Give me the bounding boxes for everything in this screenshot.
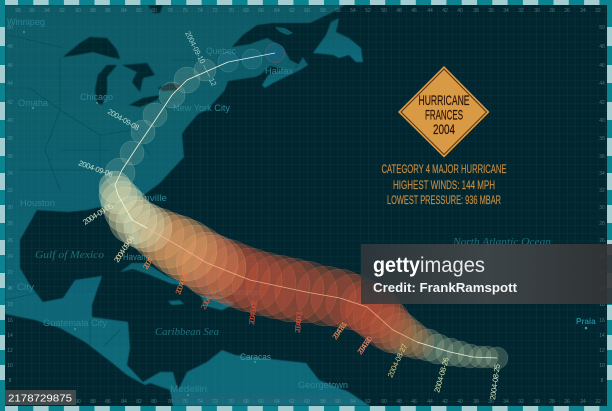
date labels along the track: 2004-09-02 [247, 300, 259, 325]
longitude labels: bottom: 24 [580, 399, 586, 405]
latitude labels: left: 38 [7, 136, 13, 142]
longitude labels: top [15, 8, 601, 14]
longitude labels: top: 90 [75, 8, 81, 14]
longitude labels: top: 80 [151, 8, 157, 14]
longitude labels: top: 44 [427, 8, 433, 14]
date labels along the track: 2004 [141, 256, 155, 271]
date labels along the track: 2004-09-01 [293, 310, 304, 333]
latitude labels: left: 26 [7, 238, 13, 244]
watermark banner: getty [373, 254, 420, 277]
longitude labels: bottom: 38 [473, 399, 479, 405]
city and sea labels: City [17, 282, 35, 292]
longitude labels: bottom: 32 [518, 399, 524, 405]
island: Hispaniola [200, 295, 235, 310]
latitude labels: left: 40 [7, 118, 13, 124]
latitude labels: left: 12 [7, 348, 13, 354]
latitude labels: left: 28 [7, 221, 13, 227]
date labels along the track: 2004-08-27 [386, 342, 409, 379]
longitude labels: bottom: 44 [427, 399, 433, 405]
longitude labels: top: 58 [320, 8, 326, 14]
longitude labels: bottom: 36 [488, 399, 494, 405]
latitude labels: left: 30 [7, 205, 13, 211]
longitude labels: top: 46 [411, 8, 417, 14]
island: Jamaica [168, 300, 184, 305]
latitude labels: right: 8 [601, 378, 604, 384]
border: right checker strip [607, 0, 612, 411]
longitude labels: top: 78 [167, 8, 173, 14]
latitude labels: right: 38 [599, 136, 605, 142]
longitude labels: bottom: 30 [534, 399, 540, 405]
latitude labels: left: 16 [7, 318, 13, 324]
city and sea labels: Omaha [18, 98, 48, 108]
longitude labels: top: 86 [105, 8, 111, 14]
longitude labels: bottom [75, 399, 601, 405]
latitude labels: left: 32 [7, 188, 13, 194]
border: bottom checker strip [0, 406, 612, 411]
latitude labels: right: 12 [599, 348, 605, 354]
latitude labels: right: 10 [599, 363, 605, 369]
peninsula: Nova Scotia [262, 57, 308, 88]
latitude labels: right: 50 [599, 25, 605, 31]
longitude labels: bottom: 40 [457, 399, 463, 405]
city and sea labels: Quebec [206, 46, 236, 56]
latitude labels: left: 36 [7, 154, 13, 160]
longitude labels: top: 40 [457, 8, 463, 14]
longitude labels: top: 96 [29, 8, 35, 14]
latitude labels: left: 48 [7, 44, 13, 50]
city and sea labels: Houston [20, 198, 55, 208]
city and sea labels: New York City [173, 103, 230, 113]
longitude labels: top: 38 [473, 8, 479, 14]
date labels along the track [77, 30, 502, 400]
warning sign: 2004 [433, 121, 455, 137]
latitude labels: left: 34 [7, 171, 13, 177]
longitude labels: top: 72 [212, 8, 218, 14]
longitude labels: bottom: 78 [167, 399, 173, 405]
state borders [5, 34, 195, 345]
city and sea labels: Guatemala City [43, 318, 108, 328]
city and sea labels: North Atlantic Ocean [452, 236, 552, 248]
city and sea labels: Praia [576, 317, 596, 326]
longitude labels: bottom: 60 [304, 399, 310, 405]
latitude labels: left: 42 [7, 100, 13, 106]
longitude labels: top: 34 [503, 8, 509, 14]
latitude labels: left: 8 [9, 378, 12, 384]
date labels along the track: 2004-08-26 [432, 356, 451, 394]
longitude labels: bottom: 88 [90, 399, 96, 405]
map: land masses [5, 5, 370, 406]
longitude labels: bottom: 90 [75, 399, 81, 405]
date labels along the track: 2004-08-30 [355, 335, 374, 356]
island: Anticosti [275, 27, 293, 35]
longitude labels: bottom: 42 [442, 399, 448, 405]
longitude labels: bottom: 72 [212, 399, 218, 405]
longitude labels: top: 92 [59, 8, 65, 14]
latitude labels: right: 30 [599, 205, 605, 211]
longitude labels: top: 42 [442, 8, 448, 14]
longitude labels: bottom: 74 [197, 399, 203, 405]
Great Lakes [63, 5, 183, 107]
longitude labels: top: 62 [289, 8, 295, 14]
city and sea labels: Medellin [170, 384, 207, 394]
latitude labels: left: 50 [7, 25, 13, 31]
date labels along the track: 2004-09-08 [106, 107, 141, 132]
longitude labels: bottom: 64 [274, 399, 280, 405]
latitude labels: left: 22 [7, 270, 13, 276]
latitude labels: right: 20 [599, 286, 605, 292]
date labels along the track: 2004-08-31 [330, 320, 349, 341]
latitude labels: right: 46 [599, 63, 605, 69]
longitude labels: top: 64 [274, 8, 280, 14]
warning sign [398, 66, 490, 158]
image id tag: 2178729875 [8, 392, 72, 404]
longitude labels: bottom: 80 [151, 399, 157, 405]
city and sea labels: Caribbean Sea [155, 326, 219, 338]
longitude labels: top: 60 [304, 8, 310, 14]
city and sea labels: Jacksonville [113, 193, 167, 203]
longitude labels: top: 36 [488, 8, 494, 14]
longitude labels: top: 84 [121, 8, 127, 14]
latitude labels: left: 46 [7, 63, 13, 69]
longitude labels: top: 32 [518, 8, 524, 14]
date labels along the track: 2004-09-06 [77, 158, 114, 179]
longitude labels: bottom: 28 [549, 399, 555, 405]
watermark banner: images [420, 254, 485, 277]
city and sea labels: Halifax [265, 66, 294, 76]
latitude labels: right: 16 [599, 318, 605, 324]
city and sea labels: Santo Domingo [205, 288, 261, 297]
latitude labels: right: 26 [599, 238, 605, 244]
longitude labels: top: 26 [564, 8, 570, 14]
longitude labels: top: 88 [90, 8, 96, 14]
date labels along the track: 2004-09-04 [112, 234, 136, 264]
border: top checker strip [0, 0, 612, 5]
latitude labels: left: 14 [7, 333, 13, 339]
longitude labels: top: 70 [228, 8, 234, 14]
date labels along the track: 2004-09-05 [81, 201, 115, 227]
city and sea labels: Chicago [80, 92, 113, 102]
latitude labels: right: 32 [599, 188, 605, 194]
watermark banner: Credit: FrankRamspott [373, 281, 518, 295]
latitude labels: right: 14 [599, 333, 605, 339]
longitude labels: bottom: 68 [243, 399, 249, 405]
latitude labels: right: 28 [599, 221, 605, 227]
latitude labels: right: 24 [599, 254, 605, 260]
longitude labels: bottom: 50 [381, 399, 387, 405]
island: Newfoundland [313, 18, 363, 62]
longitude labels: bottom: 54 [350, 399, 356, 405]
longitude labels: bottom: 56 [335, 399, 341, 405]
longitude labels: top: 28 [549, 8, 555, 14]
border: left checker strip [0, 0, 5, 411]
longitude labels: top: 56 [335, 8, 341, 14]
longitude labels: top: 66 [258, 8, 264, 14]
longitude labels: top: 54 [350, 8, 356, 14]
latitude labels: right: 42 [599, 100, 605, 106]
longitude labels: bottom: 70 [228, 399, 234, 405]
longitude labels: bottom: 66 [258, 399, 264, 405]
longitude labels: top: 68 [243, 8, 249, 14]
longitude labels: bottom: 52 [365, 399, 371, 405]
storm statistics text: CATEGORY 4 MAJOR HURRICANE [382, 162, 506, 176]
island: Cuba [120, 263, 187, 285]
longitude labels: bottom: 22 [595, 399, 601, 405]
longitude labels: top: 24 [580, 8, 586, 14]
longitude labels: top: 22 [595, 8, 601, 14]
latitude labels: left: 20 [7, 286, 13, 292]
latitude labels: left: 44 [7, 81, 13, 87]
hurricane track line [115, 53, 497, 358]
longitude labels: top: 98 [15, 8, 21, 14]
latitude labels: left: 18 [7, 302, 13, 308]
longitude labels: bottom: 58 [320, 399, 326, 405]
longitude labels: bottom: 34 [503, 399, 509, 405]
storm statistics text: LOWEST PRESSURE: 936 MBAR [387, 193, 501, 207]
longitude labels: bottom: 26 [564, 399, 570, 405]
watermark banner [361, 244, 612, 304]
longitude labels: top: 52 [365, 8, 371, 14]
longitude labels: top: 94 [44, 8, 50, 14]
city and sea labels: Winnipeg [7, 17, 45, 27]
date labels along the track: 2004-08-25 [488, 363, 502, 400]
city and sea labels: Georgetown [298, 380, 348, 390]
longitude labels: top: 30 [534, 8, 540, 14]
latitude labels: left: 24 [7, 254, 13, 260]
date labels along the track: 2004 [199, 294, 213, 311]
hurricane swath: wind-field circles [99, 44, 508, 369]
latitude labels: right: 18 [599, 302, 605, 308]
longitude labels: bottom: 48 [396, 399, 402, 405]
longitude labels: top: 74 [197, 8, 203, 14]
latitude labels: left [7, 25, 13, 384]
latitude labels: right: 48 [599, 44, 605, 50]
city and sea labels: Caracas [240, 352, 271, 362]
longitude labels: top: 82 [136, 8, 142, 14]
longitude labels: bottom: 46 [411, 399, 417, 405]
longitude labels: bottom: 82 [136, 399, 142, 405]
latitude labels: right [599, 25, 605, 384]
longitude labels: top: 50 [381, 8, 387, 14]
storm statistics text [382, 162, 506, 207]
storm statistics text: HIGHEST WINDS: 144 MPH [393, 178, 495, 192]
longitude labels: top: 76 [182, 8, 188, 14]
warning sign: FRANCES [425, 106, 463, 122]
longitude labels: bottom: 86 [105, 399, 111, 405]
longitude labels: bottom: 76 [182, 399, 188, 405]
longitude labels: bottom: 62 [289, 399, 295, 405]
latitude labels: right: 36 [599, 154, 605, 160]
longitude labels: top: 48 [396, 8, 402, 14]
latitude labels: right: 22 [599, 270, 605, 276]
latitude labels: right: 44 [599, 81, 605, 87]
latitude labels: right: 34 [599, 171, 605, 177]
date labels along the track: 2004-09-03 [173, 269, 190, 296]
image id tag [5, 390, 76, 405]
latitude labels: right: 40 [599, 118, 605, 124]
longitude labels: bottom: 84 [121, 399, 127, 405]
city and sea labels: Gulf of Mexico [35, 249, 105, 261]
latitude labels: left: 10 [7, 363, 13, 369]
warning sign: HURRICANE [418, 92, 470, 108]
city and sea labels: Havana [123, 252, 150, 262]
date labels along the track: 2004-09-10 ------ 12 [183, 30, 218, 87]
